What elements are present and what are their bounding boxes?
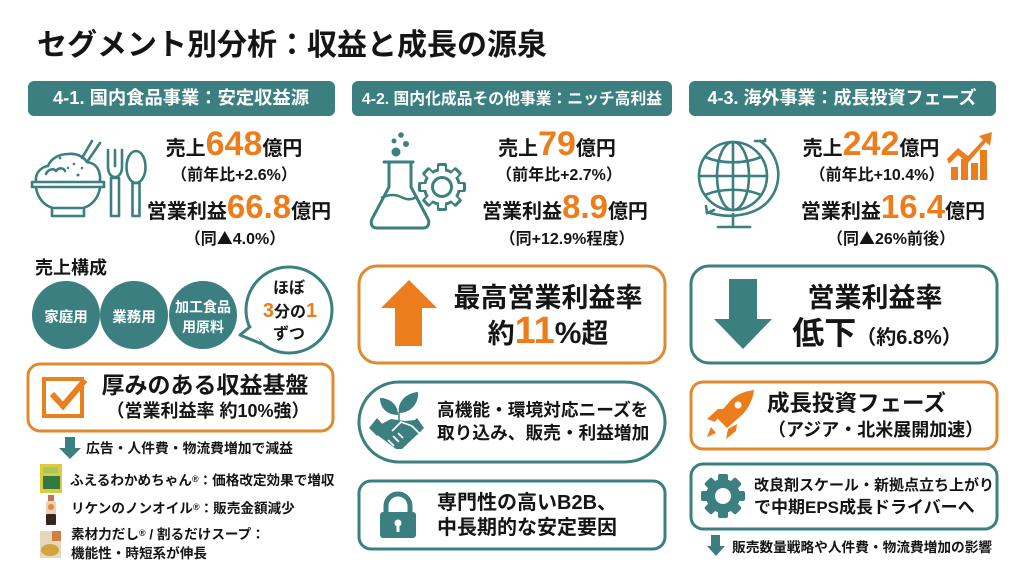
operating profit change: （同+12.9%程度） — [500, 229, 634, 248]
product: dressing bottle — [46, 495, 56, 525]
callout: margin decline: 営業利益率 — [808, 283, 942, 313]
callout: one third each: ほぼ — [273, 279, 305, 297]
callout: high function needs — [359, 382, 665, 462]
operating profit change: （同▲26%前後） — [827, 225, 955, 249]
sales composition circles: 加工食品 — [175, 299, 231, 315]
text: soup: 素材力だし — [71, 527, 139, 542]
icon: padlock — [380, 494, 416, 538]
icon: rocket — [707, 390, 754, 439]
callout: one third each — [240, 267, 332, 353]
sales composition circles: 用原料 — [182, 319, 224, 335]
callout: B2B stability: 専門性の高いB2B、 — [437, 491, 617, 514]
operating profit change: （同▲4.0%） — [185, 225, 285, 249]
callout: high function needs: 高機能・環境対応ニーズを — [437, 399, 648, 420]
text: wakame: ふえるわかめちゃん — [70, 473, 192, 488]
callout: thick profit base — [28, 364, 333, 431]
callout: improver scale: 改良剤スケール・新拠点立ち上がり — [754, 476, 994, 494]
heading: 4-1: 4-1. 国内食品事業：安定収益源 — [53, 87, 309, 108]
callout: improver scale — [691, 464, 997, 529]
text: overseas decline reason: 販売数量戦略や人件費・物流費増加の影響 — [732, 539, 992, 555]
product: soup pouch — [40, 531, 61, 558]
text: non-oil: ® — [193, 502, 200, 512]
callout: growth phase: 成長投資フェーズ — [767, 390, 946, 416]
callout: high function needs: 取り込み、販売・利益増加 — [437, 423, 649, 443]
callout: highest margin: 約11%超 — [488, 310, 608, 352]
icon: flask and gear — [371, 132, 466, 228]
arrow: overseas decline — [707, 535, 725, 556]
sales change: （前年比+2.6%） — [171, 165, 297, 184]
heading: 4-2 — [352, 81, 672, 116]
callout: improver scale: で中期EPS成長ドライバーへ — [754, 497, 975, 517]
operating profit figure: 営業利益66.8億円 — [147, 188, 331, 225]
heading: 4-3: 4-3. 海外事業：成長投資フェーズ — [707, 87, 977, 108]
sales composition circles: 家庭用 — [44, 309, 88, 326]
title: セグメント別分析：収益と成長の源泉 — [37, 29, 547, 62]
callout: one third each: 3分の1 — [263, 300, 317, 322]
sales composition circles — [32, 281, 237, 349]
callout: B2B stability — [359, 481, 665, 549]
icon: checkbox — [44, 379, 85, 416]
operating profit figure: 営業利益16.4億円 — [801, 188, 985, 225]
sales figure: 売上79億円 — [498, 125, 616, 163]
heading: 4-2: 4-2. 国内化成品その他事業：ニッチ高利益 — [362, 89, 662, 108]
callout: margin decline: 低下（約6.8%） — [792, 315, 962, 351]
callout: one third each: ずつ — [273, 325, 305, 343]
arrow: profit decline — [59, 437, 81, 459]
icon: down arrow — [714, 279, 772, 349]
callout: highest margin — [359, 266, 665, 363]
callout: thick profit base: （営業利益率 約10%強） — [106, 401, 310, 421]
sales composition heading: 売上構成 — [35, 257, 107, 278]
panel: domestic food — [28, 81, 335, 561]
callout: growth phase — [691, 382, 997, 449]
icon: rice bowl and cutlery — [32, 141, 146, 216]
rice grains — [59, 157, 83, 176]
sales figure: 売上242億円 — [803, 125, 939, 163]
text: profit decline reason: 広告・人件費・物流費増加で減益 — [86, 440, 293, 456]
callout: growth phase: （アジア・北米展開加速） — [768, 420, 983, 440]
operating profit figure: 営業利益8.9億円 — [482, 188, 648, 225]
icon: growth chart — [947, 132, 992, 180]
sales change: （前年比+10.4%） — [810, 165, 944, 184]
callout: margin decline — [691, 266, 997, 363]
callout: thick profit base: 厚みのある収益基盤 — [102, 372, 308, 398]
icon: up arrow — [381, 280, 437, 346]
icon: handshake with sprout — [369, 392, 424, 449]
sales composition circles: 業務用 — [112, 308, 156, 326]
product: wakame bag — [40, 464, 62, 493]
heading: 4-3 — [689, 81, 996, 116]
text: functional: 機能性・時短系が伸長 — [71, 545, 207, 561]
text: soup: / 割るだけスープ： — [146, 526, 265, 542]
icon: gear — [701, 474, 745, 518]
panel: domestic chemicals — [352, 81, 672, 549]
text: non-oil: リケンのノンオイル — [71, 501, 193, 516]
callout: B2B stability: 中長期的な安定要因 — [437, 516, 617, 539]
sales change: （前年比+2.7%） — [496, 165, 622, 184]
sales figure: 売上648億円 — [166, 125, 302, 163]
heading: 4-1 — [28, 81, 335, 116]
icon: globe — [699, 139, 778, 227]
callout: highest margin: 最高営業利益率 — [454, 283, 642, 313]
text: soup: ® — [139, 528, 146, 538]
text: wakame: ® — [192, 474, 199, 484]
text: wakame: ：価格改定効果で増収 — [199, 472, 335, 488]
text: non-oil: ：販売金額減少 — [200, 500, 295, 516]
panel: overseas — [689, 81, 997, 556]
